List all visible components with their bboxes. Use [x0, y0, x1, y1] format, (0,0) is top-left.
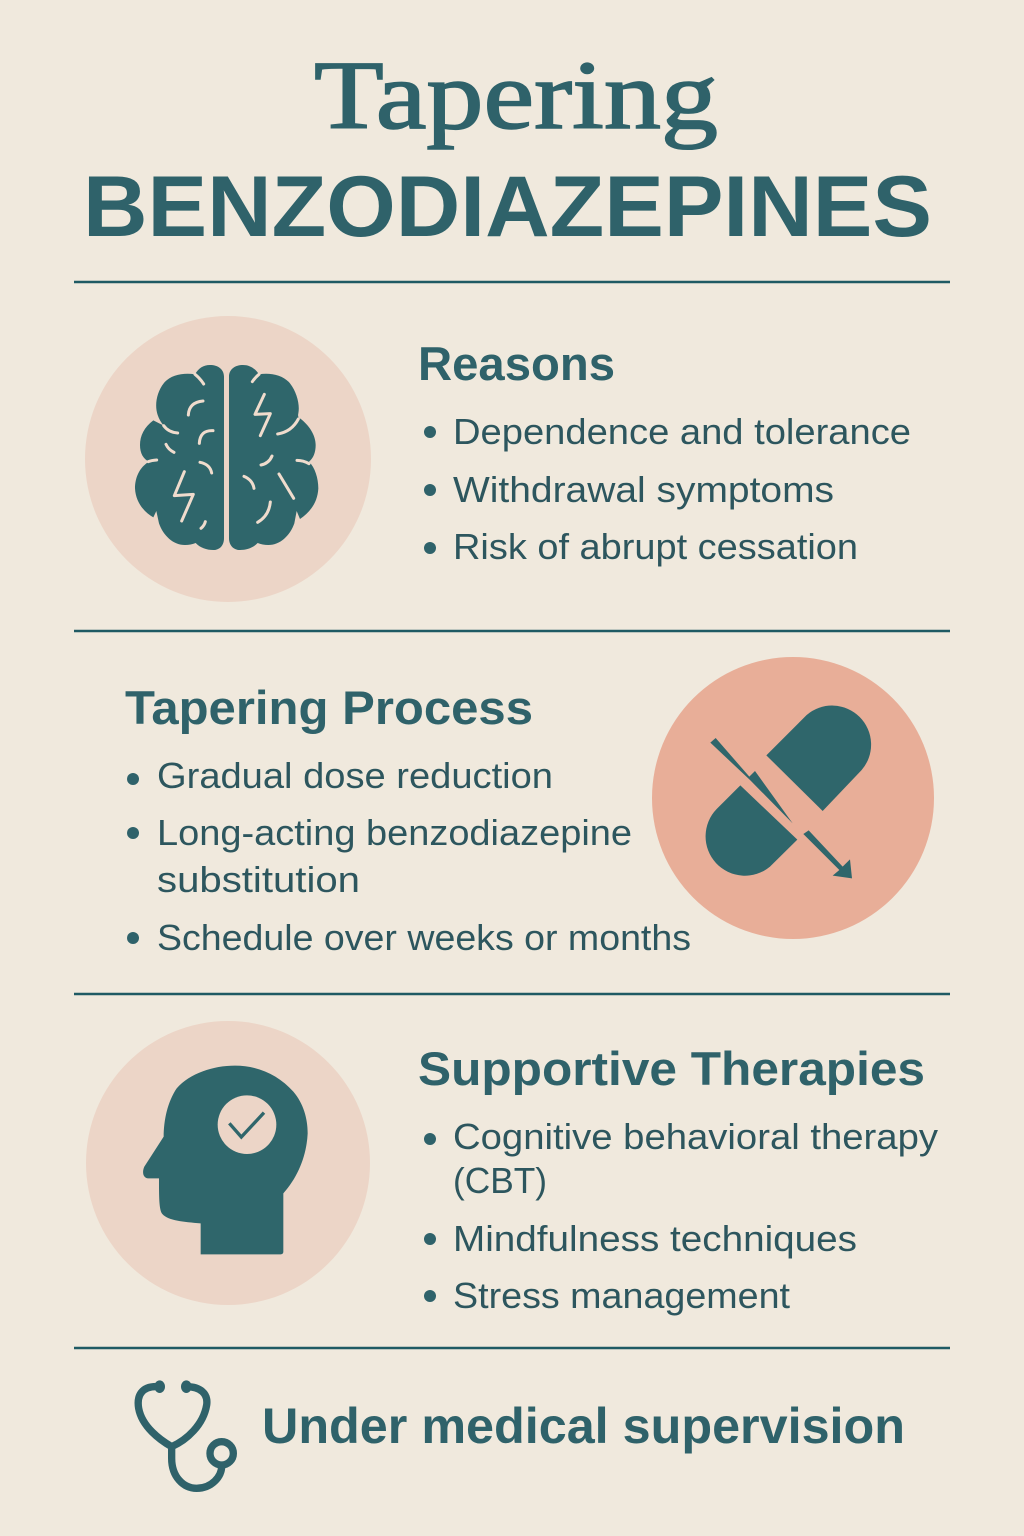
list: reasons: Withdrawal symptoms	[453, 469, 834, 510]
title: BENZODIAZEPINES	[83, 159, 932, 255]
list: supportive therapies: Stress management	[453, 1275, 790, 1316]
list: tapering process: Gradual dose reduction	[157, 755, 553, 796]
title: Tapering	[314, 42, 718, 150]
heading: supportive therapies: Supportive Therapies	[418, 1042, 925, 1095]
list: reasons: Dependence and tolerance	[453, 411, 911, 452]
panel: reasons	[85, 316, 911, 602]
list: tapering process: substitution	[157, 859, 360, 900]
list: reasons	[424, 411, 911, 567]
list: reasons: Risk of abrupt cessation	[453, 526, 858, 567]
list: supportive therapies: Cognitive behavioral therapy	[453, 1116, 938, 1157]
icon: stethoscope	[138, 1380, 233, 1488]
icon: brain	[85, 316, 371, 602]
footer: medical supervision	[138, 1380, 905, 1488]
title	[83, 42, 932, 255]
list: tapering process	[127, 755, 691, 958]
panel: tapering process	[125, 657, 934, 958]
list: supportive therapies: Mindfulness techniques	[453, 1218, 857, 1259]
list: tapering process: Schedule over weeks or months	[157, 917, 691, 958]
list: supportive therapies: (CBT)	[453, 1160, 547, 1201]
panel: supportive therapies	[86, 1021, 938, 1316]
icon: split pill with arrow	[652, 657, 934, 939]
icon: head with check mark	[86, 1021, 370, 1305]
list: tapering process: Long-acting benzodiazepine	[157, 812, 632, 853]
heading: reasons: Reasons	[418, 337, 615, 390]
list: supportive therapies	[424, 1116, 938, 1316]
text: under medical supervision: Under medical supervision	[262, 1398, 905, 1454]
heading: tapering process: Tapering Process	[125, 681, 533, 734]
